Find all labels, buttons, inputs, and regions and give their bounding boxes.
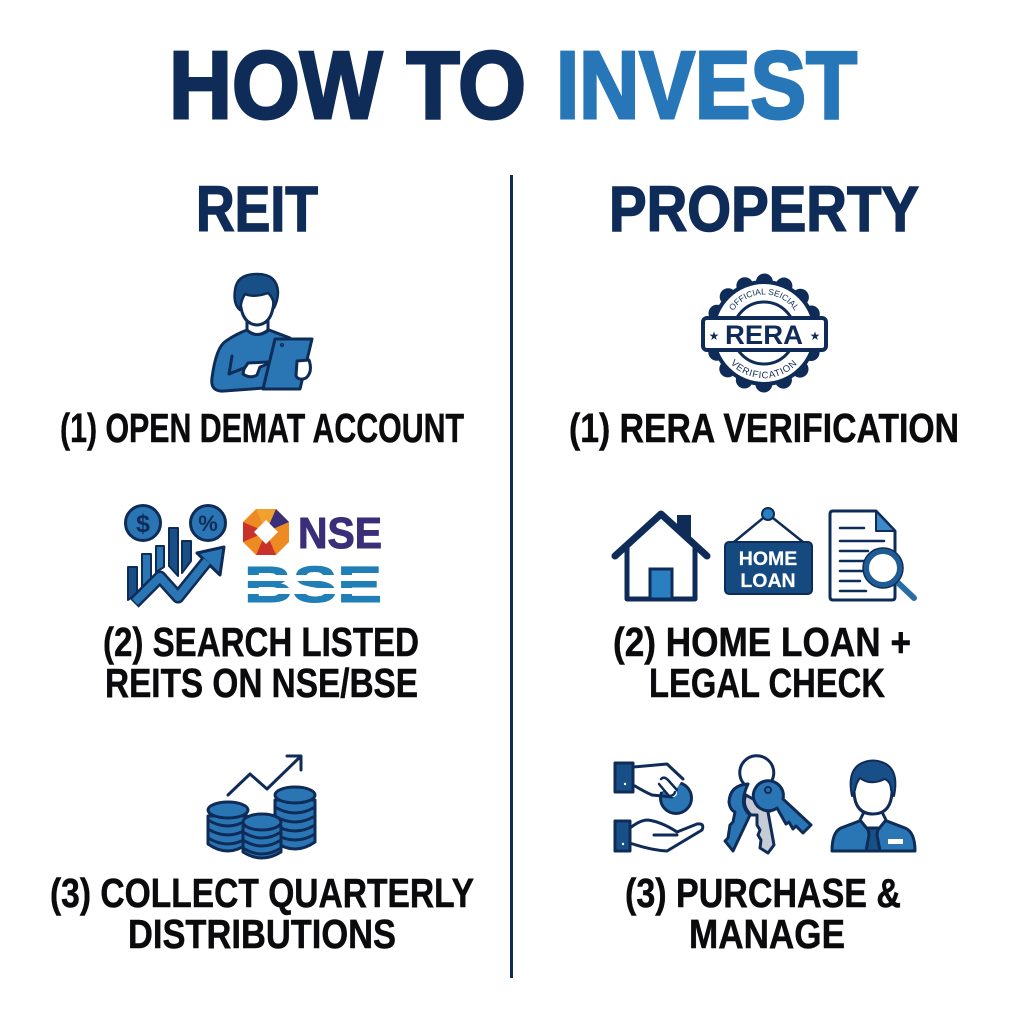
step label: search listed REITs <box>103 619 419 706</box>
step label: search listed REITs: (2) SEARCH LISTED <box>103 619 419 665</box>
icon: document with magnifier <box>830 511 914 600</box>
icon: RERA seal <box>701 274 828 392</box>
title: INVEST <box>556 32 857 139</box>
title: HOW TO <box>169 32 526 139</box>
icon: RERA seal: RERA <box>725 320 803 350</box>
title <box>169 32 857 139</box>
icon: house <box>615 514 707 599</box>
icon: home loan sign: HOME <box>739 548 797 570</box>
icon: RERA seal: ★ <box>709 329 719 343</box>
logo: NSE: NSE <box>298 509 382 558</box>
icon: RERA seal: OFFICIAL SEICIAL <box>730 288 798 311</box>
panel: REIT <box>50 173 474 957</box>
step label: collect quarterly distributions: (3) COLLECT QUARTERLY <box>50 870 474 916</box>
icon: home loan sign: LOAN <box>740 570 796 592</box>
icon: percent coin: % <box>198 511 218 536</box>
step label: collect quarterly distributions <box>50 870 474 957</box>
step label: purchase and manage <box>625 870 901 957</box>
heading: PROPERTY: PROPERTY <box>609 173 919 245</box>
icon: market growth chart <box>126 506 226 603</box>
step label: home loan and legal check <box>613 619 911 706</box>
heading: REIT: REIT <box>196 173 318 245</box>
step label: collect quarterly distributions: DISTRIBUTIONS <box>128 911 396 957</box>
step label: purchase and manage: MANAGE <box>689 911 845 957</box>
icon: RERA seal: VERIFICATION <box>732 358 796 378</box>
logo: BSE: BSE <box>244 556 382 613</box>
icon: person with tablet <box>212 274 312 391</box>
icon: dollar coin: $ <box>136 510 150 538</box>
icon: hands passing coin <box>615 763 703 851</box>
step label: search listed REITs: REITS ON NSE/BSE <box>105 660 418 706</box>
icon: RERA seal: ★ <box>810 329 820 343</box>
step label: open demat account: (1) OPEN DEMAT ACCOUNT <box>60 405 464 451</box>
logo: NSE <box>243 509 382 558</box>
icon: home loan sign <box>725 508 812 594</box>
step label: home loan and legal check: (2) HOME LOAN + <box>613 619 911 665</box>
icon: coin stacks with rising arrow <box>208 756 315 858</box>
center divider <box>510 175 513 978</box>
step label: purchase and manage: (3) PURCHASE & <box>625 870 901 916</box>
panel: PROPERTY <box>569 173 959 957</box>
icon: property manager <box>832 760 915 851</box>
step label: home loan and legal check: LEGAL CHECK <box>649 660 885 706</box>
icon: keys on ring <box>725 756 811 853</box>
